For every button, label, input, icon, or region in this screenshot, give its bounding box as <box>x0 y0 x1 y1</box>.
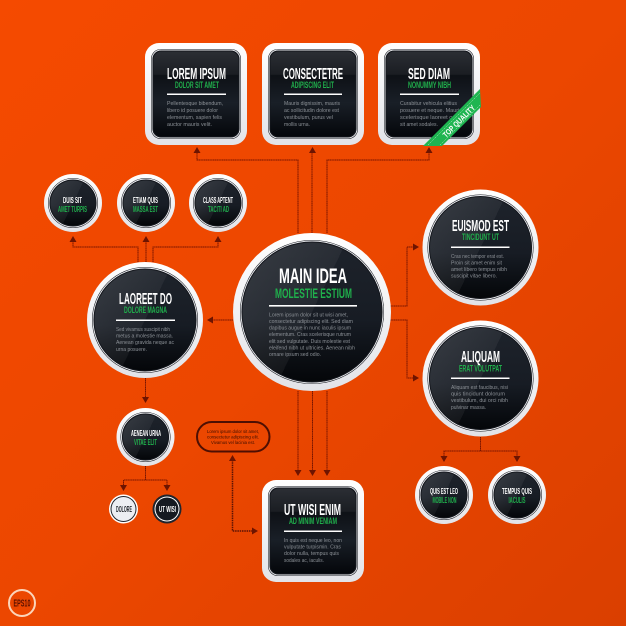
panel: dolore <box>109 494 138 524</box>
body text <box>167 101 223 128</box>
badge: eps10 <box>9 590 35 616</box>
panel: sed diam <box>378 43 480 145</box>
body text: pulvinar massa. <box>451 405 486 411</box>
panel: class aptent <box>189 174 247 232</box>
panel: duis sit <box>44 174 102 232</box>
panel: tempus quis <box>488 466 546 524</box>
body text: mollis urna. <box>284 122 310 128</box>
panel: ut wisi enim <box>262 480 364 582</box>
subheading: AD MINIM VENIAM <box>289 516 337 527</box>
heading: LOREM IPSUM <box>167 66 226 83</box>
panel: quis est leo: QUIS EST LEO <box>430 486 458 496</box>
body text: Mauris dignissim, mauris <box>284 101 341 107</box>
body text <box>284 538 342 564</box>
heading: SED DIAM <box>408 66 450 83</box>
panel: consectetre <box>262 43 364 145</box>
body text: libero id posuere dolor <box>167 108 218 114</box>
body text <box>269 312 355 358</box>
panel: quis est leo <box>415 466 473 524</box>
arrow: main idea to laoreet <box>207 316 233 324</box>
body text: ac sollicitudin dolore est <box>284 108 340 114</box>
panel: class aptent: CLASS APTENT <box>203 195 233 205</box>
panel: aenean urna: AENEAN URNA <box>131 428 161 438</box>
connector: main idea to aliquam <box>385 320 419 382</box>
panel: laoreet do <box>87 262 203 378</box>
subheading: TACITI AD <box>208 204 229 214</box>
body text: Proin sit amet enim sit <box>451 260 503 266</box>
panel: ut wisi: UT WISI <box>159 505 176 514</box>
subheading: ADIPISCING ELIT <box>291 80 334 91</box>
subheading: MOLESTIE ESTIUM <box>275 285 352 301</box>
panel: aliquam <box>422 320 538 436</box>
heading: CONSECTETRE <box>283 66 343 83</box>
heading: UT WISI ENIM <box>284 502 341 519</box>
callout: note: Lorem ipsum dolor sit amet, <box>207 429 259 434</box>
body text: eleifend nibh ut ultricies. Aenean nibh <box>269 346 355 352</box>
panel: etiam quis <box>117 174 175 232</box>
panel: quis est leo: MOBILE NON <box>432 495 456 505</box>
body text: elementum. Cras scelerisque rutrum <box>269 332 351 338</box>
body text: sit amet sodales. <box>400 122 438 128</box>
subheading: DOLOR SIT AMET <box>175 80 219 91</box>
body text <box>284 101 341 128</box>
body text: Cras nec tempor erat est. <box>451 254 504 260</box>
heading: ETIAM QUIS <box>133 195 158 205</box>
body text: amet libero tempus nibh <box>451 267 507 273</box>
body text: Lorem ipsum dolor sit ut wisi amet, <box>269 312 348 318</box>
subheading: ERAT VOLUTPAT <box>459 364 502 374</box>
callout: note <box>197 422 270 452</box>
panel: dolore: DOLORE <box>116 505 132 514</box>
body text: auctor mauris velit. <box>167 122 212 128</box>
body text: consectetur adipiscing elit. Sed diam <box>269 319 353 325</box>
subheading: TINCIDUNT UT <box>462 232 499 243</box>
connector: note to ut wisi enim <box>229 455 258 534</box>
body text: Aenean gravida neque ac <box>116 340 174 346</box>
heading: EUISMOD EST <box>452 218 509 235</box>
ribbon: top quality <box>423 89 481 146</box>
connector: aenean to small circles <box>120 466 170 491</box>
badge: eps10: EPS10 <box>14 598 31 610</box>
ribbon: top quality: TOP QUALITY <box>441 103 477 139</box>
subheading: MASSA EST <box>133 204 158 214</box>
heading: LAOREET DO <box>119 291 172 308</box>
heading: DUIS SIT <box>63 195 82 205</box>
body text: scelerisque laoreet odio <box>400 115 460 121</box>
panel: aenean urna <box>116 408 174 466</box>
body text: quis tincidunt dolorum <box>451 392 505 398</box>
body text: Pellentesque bibendum, <box>167 101 223 107</box>
heading: ALIQUAM <box>461 349 500 366</box>
subheading: VITAE ELIT <box>134 437 157 447</box>
body text: dapibus augue in nunc iaculis ipsum <box>269 326 351 332</box>
panel: euismod est <box>422 190 538 306</box>
arrow: laoreet to aenean <box>142 378 149 403</box>
panel: lorem ipsum <box>145 43 247 145</box>
body text: Aliquam est faucibus, nisi <box>451 385 508 391</box>
callout: note: consectetur adipiscing elit. <box>207 434 259 440</box>
body text: elementum, sapien felis <box>167 115 223 121</box>
subheading: DOLORE MAGNA <box>124 305 167 316</box>
body text <box>451 254 507 280</box>
body text: urna posuere. <box>116 347 147 353</box>
connector: laoreet to small circles <box>70 236 222 262</box>
callout: note: Vivamus vel lacinia est. <box>211 440 255 445</box>
panel: main idea <box>233 233 391 391</box>
heading: MAIN IDEA <box>279 265 347 288</box>
body text <box>400 101 463 128</box>
body text: metus a molestie massa. <box>116 334 173 340</box>
body text <box>116 327 174 353</box>
connector: aliquam to small circles <box>440 437 520 462</box>
body text: Curabitur vehicula elitius <box>400 101 458 107</box>
body text: Sed vivamus suscipit nibh <box>116 327 170 333</box>
body text: sodales ac, iaculis. <box>284 558 324 564</box>
body text <box>451 385 508 411</box>
body text: In quis est neque leo, non <box>284 538 342 544</box>
panel: ut wisi <box>152 494 182 524</box>
connector: main idea to euismod <box>385 244 419 306</box>
body text: vulputate turpismin. Cras <box>284 544 342 550</box>
subheading: IACULIS <box>508 495 526 505</box>
body text: vestibulum, purus vel <box>284 115 333 121</box>
body text: ornare ipsum sed odio. <box>269 352 321 358</box>
connectors: main idea to top boxes <box>194 147 432 233</box>
subheading: NONUMMY NIBH <box>408 80 451 91</box>
heading: TEMPUS QUIS <box>502 486 532 496</box>
connectors: main idea to ut wisi enim <box>294 391 330 476</box>
body text: suscipit vitae libero. <box>451 274 497 280</box>
subheading: AMET TURPIS <box>58 204 87 214</box>
body text: vestibulum, dui orci nibh <box>451 398 508 404</box>
body text: elit sed vulputate. Duis molestie est <box>269 339 351 345</box>
body text: dolor nulla, tempus quis <box>284 551 340 557</box>
body text: posuere et neque. Mauris <box>400 108 463 114</box>
